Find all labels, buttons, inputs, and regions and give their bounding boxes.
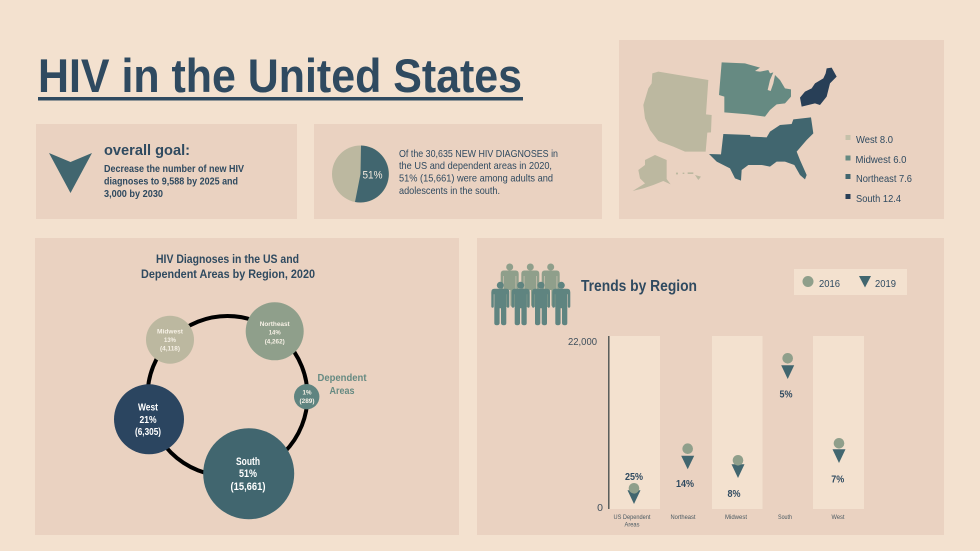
series: West: West (832, 514, 845, 521)
bubble: Northeast: 14% (269, 330, 281, 336)
bubble: Dependent Areas: 1% (302, 390, 312, 396)
series: US Dependent Areas: 25% (625, 471, 644, 483)
goal text (104, 163, 244, 200)
map legend: South 12.4 (856, 193, 901, 205)
bubble: Dependent Areas: (289) (300, 398, 314, 405)
series: South: South (778, 514, 792, 521)
map region: West (643, 72, 712, 152)
bubble: Northeast: (4,262) (265, 338, 285, 346)
map legend: Midwest 6.0 (856, 154, 907, 166)
pie description: Of the 30,635 NEW HIV DIAGNOSES in (399, 148, 558, 160)
series: South: 5% (780, 388, 793, 400)
series: Northeast: Northeast (670, 514, 696, 521)
bubble: South (203, 428, 294, 519)
chart legend (794, 269, 907, 295)
bubble: West: (6,305) (135, 426, 161, 438)
bubble: Dependent Areas (294, 384, 319, 409)
icon: downward arrowhead (49, 153, 92, 193)
dot chart (568, 336, 864, 528)
series: South (778, 353, 794, 521)
bubble: West (114, 384, 184, 454)
bubble: West: 21% (140, 414, 157, 426)
ring connector (148, 316, 308, 476)
goal text: diagnoses to 9,588 by 2025 and (104, 176, 238, 188)
series: Midwest (725, 455, 747, 521)
axis values: 22,000 (568, 336, 597, 348)
chart legend: 2016 (819, 278, 840, 290)
series: Northeast (670, 443, 696, 521)
title: HIV in the United States (38, 49, 522, 102)
bubble: South: (15,661) (230, 481, 266, 493)
series: West: 7% (831, 474, 845, 486)
pie description (399, 148, 558, 197)
bubble: Midwest: Midwest (157, 328, 184, 336)
series: Midwest: Midwest (725, 514, 747, 521)
map region: South (709, 117, 813, 181)
pie description: the US and dependent areas in 2020, (399, 160, 552, 172)
bubble: Northeast: Northeast (260, 321, 291, 328)
bubble: Midwest (146, 316, 194, 364)
goal text: Decrease the number of new HIV (104, 163, 244, 175)
axis values: 0 (597, 502, 603, 514)
series: Northeast: 14% (676, 478, 695, 490)
map region: Northeast (800, 68, 837, 107)
trends heading: Trends by Region (581, 278, 697, 295)
chart heading: Dependent Areas by Region, 2020 (141, 269, 315, 281)
chart heading: HIV Diagnoses in the US and (156, 254, 299, 266)
bubble: Midwest: (4,118) (160, 346, 180, 352)
axis values (568, 336, 603, 514)
map of US regions (633, 62, 837, 191)
series: Midwest: 8% (728, 488, 741, 500)
icon: group of people (491, 264, 570, 325)
series: US Dependent Areas (614, 471, 651, 528)
panel: south share of diagnoses (314, 124, 602, 219)
goal heading: overall goal: (104, 142, 190, 159)
bubble: Northeast (246, 302, 304, 360)
panel: map (619, 40, 944, 219)
bubble: South: South (236, 456, 260, 468)
label: Dependent Areas: Areas (330, 385, 355, 397)
map legend: Northeast 7.6 (856, 173, 912, 185)
series: US Dependent Areas: US Dependent (614, 514, 651, 521)
map region: Alaska and Hawaii (633, 155, 701, 191)
chart heading (141, 254, 315, 281)
bubble: West: West (138, 402, 158, 414)
bubble: South: 51% (239, 468, 257, 480)
goal text: 3,000 by 2030 (104, 188, 163, 200)
panel: trends by region (477, 238, 944, 535)
map legend: West 8.0 (856, 134, 893, 146)
pie description: adolescents in the south. (399, 185, 500, 197)
map region: Midwest (719, 62, 791, 117)
series: US Dependent Areas: Areas (624, 522, 640, 528)
label: Dependent Areas: Dependent (318, 372, 367, 384)
panel: diagnoses by region (35, 238, 459, 535)
panel: overall goal (36, 124, 297, 219)
chart legend: 2019 (875, 278, 896, 290)
series: West (831, 438, 846, 521)
pie description: 51% (15,661) were among adults and (399, 172, 553, 184)
pie chart (332, 146, 389, 202)
map legend (846, 134, 912, 205)
pie chart: 51% (362, 170, 383, 182)
label: Dependent Areas (318, 372, 367, 397)
bubble: Midwest: 13% (164, 337, 176, 344)
